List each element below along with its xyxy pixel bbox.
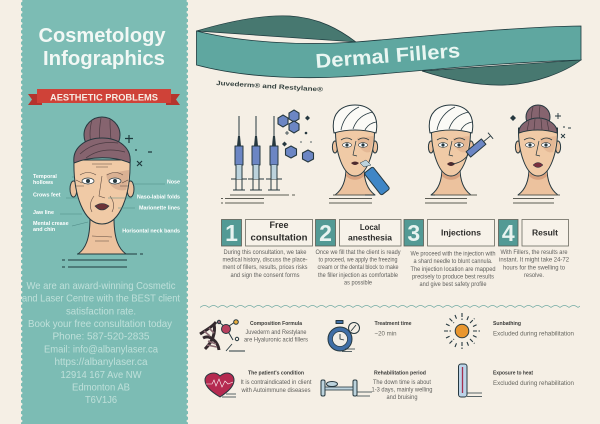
illustration: aged face (60, 117, 165, 267)
step 1 title (246, 220, 312, 246)
step 1 (222, 220, 312, 279)
sidebar title: Infographics (43, 48, 165, 70)
step 2 text: cream or the dental block to make (318, 264, 399, 271)
step 2 title: Local (360, 223, 380, 232)
face problem labels: Mental crease (33, 221, 69, 227)
item: sunbathing: Excluded during rehabilitation (493, 330, 574, 338)
step 4 title: Result (532, 228, 558, 238)
step 2 text: Once we fill that the client is ready (316, 249, 401, 256)
step 3 text: The injection location are mapped (410, 266, 496, 273)
contact text block: T6V1J6 (85, 395, 117, 406)
step 3 title: Injections (441, 228, 482, 238)
item: rehabilitation period: Rehabilitation period (374, 370, 426, 376)
contact text block: https://albanylaser.ca (54, 357, 148, 368)
item: treatment time: ~20 min (374, 330, 396, 338)
face problem labels: Horisontal neck bands (122, 228, 180, 234)
icon: dna and molecule (200, 320, 245, 351)
step 2 text: to proceed, we apply the freezing (318, 256, 398, 264)
face problem labels: and chin (33, 227, 55, 233)
item: composition formula: are Hyaluronic acid fillers (244, 336, 308, 344)
step 1 text: ment of fillers, results, prices risks (222, 264, 308, 271)
contact text block: and Laser Centre with the BEST client (22, 294, 180, 304)
item: patient's condition: The patient's condition (248, 370, 304, 376)
step 4 (498, 220, 570, 279)
item: treatment time (328, 320, 412, 352)
icon: sun (444, 313, 480, 349)
step 1 title: consultation (250, 232, 308, 242)
face problem labels: Marionette lines (139, 206, 180, 212)
step 4 text (499, 249, 570, 279)
panel: left sidebar (21, 0, 188, 424)
ribbon: aesthetic problems: AESTHETIC PROBLEMS (50, 92, 158, 102)
step 1 number: 1 (225, 220, 238, 246)
face problem labels: Naso-labial folds (137, 194, 180, 200)
contact text block (22, 281, 180, 406)
item: sunbathing: Sunbathing (493, 321, 521, 327)
sidebar title: Cosmetology (38, 25, 166, 47)
step 4 text: resolve. (524, 272, 544, 279)
step 4 text: hours for the swelling to (503, 264, 566, 272)
step 1 text: During this consultation, we take (224, 249, 307, 256)
item: exposure to heat (458, 364, 574, 397)
step 3 text (410, 250, 496, 288)
step 4 text: With Fillers, the results are (500, 249, 568, 256)
step 3 (404, 220, 496, 288)
item: rehabilitation period (321, 370, 432, 401)
banner title: Dermal Fillers (315, 40, 461, 73)
sidebar title (38, 25, 166, 70)
illustration: head with injection syringe (425, 105, 493, 203)
item: patient's condition: It is contraindicated in client (240, 379, 312, 386)
step 1 text (222, 249, 308, 279)
step 2 title: anesthesia (348, 234, 393, 242)
face problem labels: Crows feet (33, 192, 61, 198)
contact text block: We are an award-winning Cosmetic (26, 281, 176, 292)
contact text block: Email: info@albanylaser.ca (44, 344, 158, 356)
item: composition formula: Juvederm and Restylane (246, 329, 307, 336)
item: composition formula: Composition Formula (250, 321, 303, 327)
item: composition formula (200, 320, 308, 351)
step 3 text: and give best safety profile (420, 281, 487, 288)
illustration: result head with bun (510, 105, 571, 203)
step 1 text: medical history, discuss the place- (222, 256, 308, 264)
banner: dermal fillers (196, 16, 581, 85)
step 2 title (340, 220, 401, 246)
contact text block: Phone: 587-520-2835 (52, 332, 150, 342)
contact text block: Book your free consultation today (28, 319, 173, 330)
step 1 text: and sign the consent forms (230, 272, 300, 279)
icon: thermometer (458, 364, 482, 397)
illustration: syringes and molecules (221, 110, 314, 203)
contact text block: satisfaction rate. (66, 306, 136, 318)
step 4 text: instant. It might take 24-72 (499, 256, 570, 264)
item: sunbathing (444, 313, 574, 349)
item: treatment time: Treatment time (374, 321, 412, 327)
subtitle: Juvederm® and Restylane® (216, 79, 324, 94)
step 2 text (316, 249, 401, 286)
item: patient's condition (205, 370, 312, 397)
illustration: head with anesthesia tube (329, 105, 390, 203)
face problem labels (33, 174, 180, 234)
step 3 text: We proceed with the injection with (410, 250, 496, 258)
item: rehabilitation period: The down time is about (373, 379, 431, 386)
item: patient's condition: with Autoimmune diseases (241, 387, 310, 394)
contact text block: Edmonton AB (72, 382, 130, 394)
step 3 text: precisely to produce best results (412, 274, 494, 280)
step 3 text: a shard needle to blunt cannula. (414, 258, 493, 265)
step 4 number: 4 (502, 220, 515, 246)
item: rehabilitation period: and bruising (386, 394, 418, 401)
icon: heart with pulse (205, 373, 236, 397)
step 1 title: Free (269, 220, 289, 230)
face problem labels: Jaw line (33, 210, 54, 216)
step 2 text: the filler injection as comfortable (318, 272, 399, 279)
face problem labels: hollows (33, 180, 53, 186)
item: exposure to heat: Excluded during rehabilitation (493, 380, 574, 387)
item: exposure to heat: Exposure to heat (493, 370, 533, 376)
item: rehabilitation period: 1-3 days, mainly welling (372, 386, 432, 394)
step 2 number: 2 (319, 220, 332, 246)
step 2 text: as possible (344, 280, 373, 286)
contact text block: 12914 167 Ave NW (60, 370, 142, 381)
step 3 number: 3 (407, 220, 420, 246)
face problem labels: Temporal (33, 174, 57, 180)
face problem labels: Nose (167, 180, 180, 186)
icon: hospital bed (321, 380, 372, 396)
ribbon: aesthetic problems (28, 89, 180, 105)
icon: stopwatch (328, 320, 360, 352)
step 2 (316, 220, 401, 286)
